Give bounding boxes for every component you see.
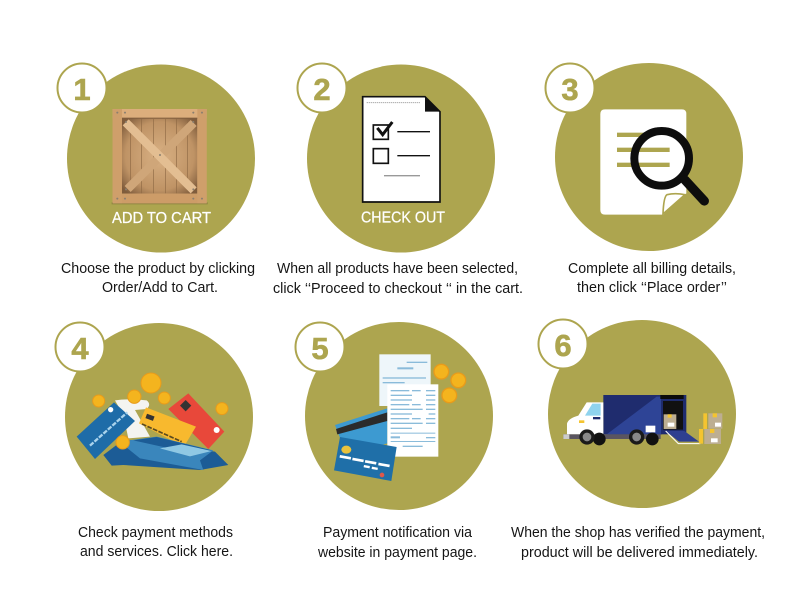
label: add to cart: ADD TO CART: [112, 210, 212, 227]
number badge 5: 5: [311, 331, 329, 366]
number badge 6: [538, 320, 588, 368]
caption 5: Payment notification via: [323, 525, 473, 541]
panel: step 4 payment methods: [56, 322, 253, 560]
caption 3: then click ‘‘Place order’’: [577, 280, 727, 296]
caption 4: and services. Click here.: [80, 544, 233, 560]
caption 4: [78, 525, 233, 560]
caption 5: [317, 525, 477, 561]
icon: wooden crate: [112, 109, 208, 204]
caption 2: click ‘‘Proceed to checkout ‘‘ in the cart.: [273, 281, 523, 297]
number badge 3: [546, 64, 594, 112]
panel: step 1 add to cart: [58, 64, 255, 296]
panel: step 3 billing details: [546, 63, 743, 296]
panel: step 6 delivery: [511, 320, 765, 561]
icon: receipts, cards and coins: [334, 354, 466, 481]
icon: checklist document: [363, 97, 440, 202]
caption 3: Complete all billing details,: [568, 261, 736, 277]
number badge 6: 6: [554, 328, 572, 363]
icon: document with magnifier: [600, 109, 704, 215]
panel: step 5 payment notification: [296, 322, 493, 561]
caption 6: When the shop has verified the payment,: [511, 525, 765, 541]
caption 2: When all products have been selected,: [277, 261, 518, 277]
caption 4: Check payment methods: [78, 525, 233, 541]
caption 3: [568, 261, 736, 296]
circle 6: [548, 320, 736, 508]
number badge 4: [56, 322, 104, 372]
circle 3: [555, 63, 743, 251]
caption 1: Order/Add to Cart.: [102, 280, 218, 296]
caption 6: product will be delivered immediately.: [521, 545, 758, 561]
circle 4: [65, 323, 253, 511]
number badge 2: 2: [313, 72, 331, 107]
number badge 1: 1: [73, 72, 91, 107]
number badge 3: 3: [561, 72, 579, 107]
caption 2: [273, 261, 523, 297]
caption 6: [511, 525, 765, 561]
number badge 4: 4: [71, 331, 89, 366]
caption 5: website in payment page.: [317, 545, 477, 561]
number badge 1: [58, 64, 106, 112]
caption 1: [61, 261, 255, 296]
circle 2: [307, 64, 495, 252]
panel: step 2 check out: [273, 64, 523, 297]
number badge 5: [296, 322, 344, 372]
icon: delivery truck: [563, 395, 722, 445]
circle 1: [67, 64, 255, 252]
icon: credit cards and terminal: [77, 373, 228, 470]
caption 1: Choose the product by clicking: [61, 261, 255, 277]
number badge 2: [298, 64, 346, 112]
label: check out: CHECK OUT: [361, 210, 445, 226]
circle 5: [305, 322, 493, 510]
